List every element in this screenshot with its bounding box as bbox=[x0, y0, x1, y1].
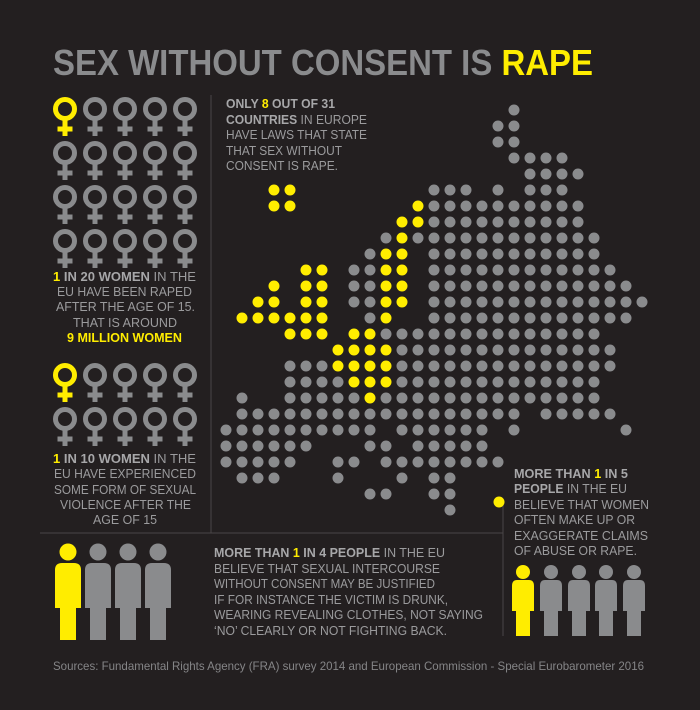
text: only 8 out of 31: HAVE LAWS THAT STATE bbox=[226, 127, 367, 142]
text: 1 in 10 women bbox=[53, 451, 196, 527]
text: more than 1 in 5 bbox=[514, 466, 649, 558]
text: more than 1 in 5: OF ABUSE OR RAPE. bbox=[514, 543, 637, 558]
sources: Sources: Fundamental Rights Agency (FRA) survey 2014 and European Commission - Special Eurobarometer 2016 bbox=[53, 659, 644, 673]
text: 1 in 20 women: 1 IN 20 WOMEN IN THE bbox=[53, 269, 196, 284]
text: only 8 out of 31: COUNTRIES IN EUROPE bbox=[226, 112, 367, 127]
text: 1 in 20 women: THAT IS AROUND bbox=[73, 315, 177, 330]
title: SEX WITHOUT CONSENT IS RAPE bbox=[53, 42, 593, 83]
text: only 8 out of 31: THAT SEX WITHOUT bbox=[226, 143, 342, 158]
icon grid: 1 in 10 women bbox=[56, 366, 194, 446]
text: more than 1 in 4 people: IF FOR INSTANCE THE VICTIM IS DRUNK, bbox=[214, 592, 448, 607]
text: 1 in 10 women: AGE OF 15 bbox=[93, 512, 157, 527]
text: more than 1 in 4 people: ‘NO’ CLEARLY OR NOT FIGHTING BACK. bbox=[214, 623, 447, 638]
text: more than 1 in 5: MORE THAN 1 IN 5 bbox=[514, 466, 628, 481]
text: 1 in 10 women: SOME FORM OF SEXUAL bbox=[54, 482, 196, 497]
icon row: 4 people bbox=[55, 544, 171, 640]
text: more than 1 in 4 people bbox=[214, 545, 483, 638]
icon: yellow dot marker bbox=[494, 496, 504, 508]
text: 1 in 10 women: EU HAVE EXPERIENCED bbox=[54, 466, 196, 481]
text: 1 in 20 women bbox=[53, 269, 196, 345]
text: more than 1 in 4 people: WITHOUT CONSENT MAY BE JUSTIFIED bbox=[214, 576, 435, 591]
text: more than 1 in 4 people: MORE THAN 1 IN 4 PEOPLE IN THE EU bbox=[214, 545, 445, 560]
text: 1 in 10 women: VIOLENCE AFTER THE bbox=[60, 497, 191, 512]
text: 1 in 20 women: 9 MILLION WOMEN bbox=[67, 330, 182, 345]
text: more than 1 in 4 people: WEARING REVEALING CLOTHES, NOT SAYING bbox=[214, 607, 483, 622]
text: more than 1 in 5: PEOPLE IN THE EU bbox=[514, 481, 627, 496]
text: more than 1 in 5: EXAGGERATE CLAIMS bbox=[514, 528, 648, 543]
text: more than 1 in 5: BELIEVE THAT WOMEN bbox=[514, 497, 649, 512]
text: only 8 out of 31: ONLY 8 OUT OF 31 bbox=[226, 96, 335, 111]
text: more than 1 in 5: OFTEN MAKE UP OR bbox=[514, 512, 635, 527]
icon row: 5 people bbox=[512, 565, 645, 636]
icon grid: 1 in 20 women bbox=[56, 100, 194, 268]
text: only 8 out of 31 bbox=[226, 96, 367, 173]
map: Europe dot grid bbox=[226, 104, 642, 510]
text: 1 in 20 women: EU HAVE BEEN RAPED bbox=[57, 284, 192, 299]
text: 1 in 10 women: 1 IN 10 WOMEN IN THE bbox=[53, 451, 196, 466]
text: only 8 out of 31: CONSENT IS RAPE. bbox=[226, 158, 338, 173]
text: 1 in 20 women: AFTER THE AGE OF 15. bbox=[56, 299, 195, 314]
text: more than 1 in 4 people: BELIEVE THAT SEXUAL INTERCOURSE bbox=[214, 561, 440, 576]
